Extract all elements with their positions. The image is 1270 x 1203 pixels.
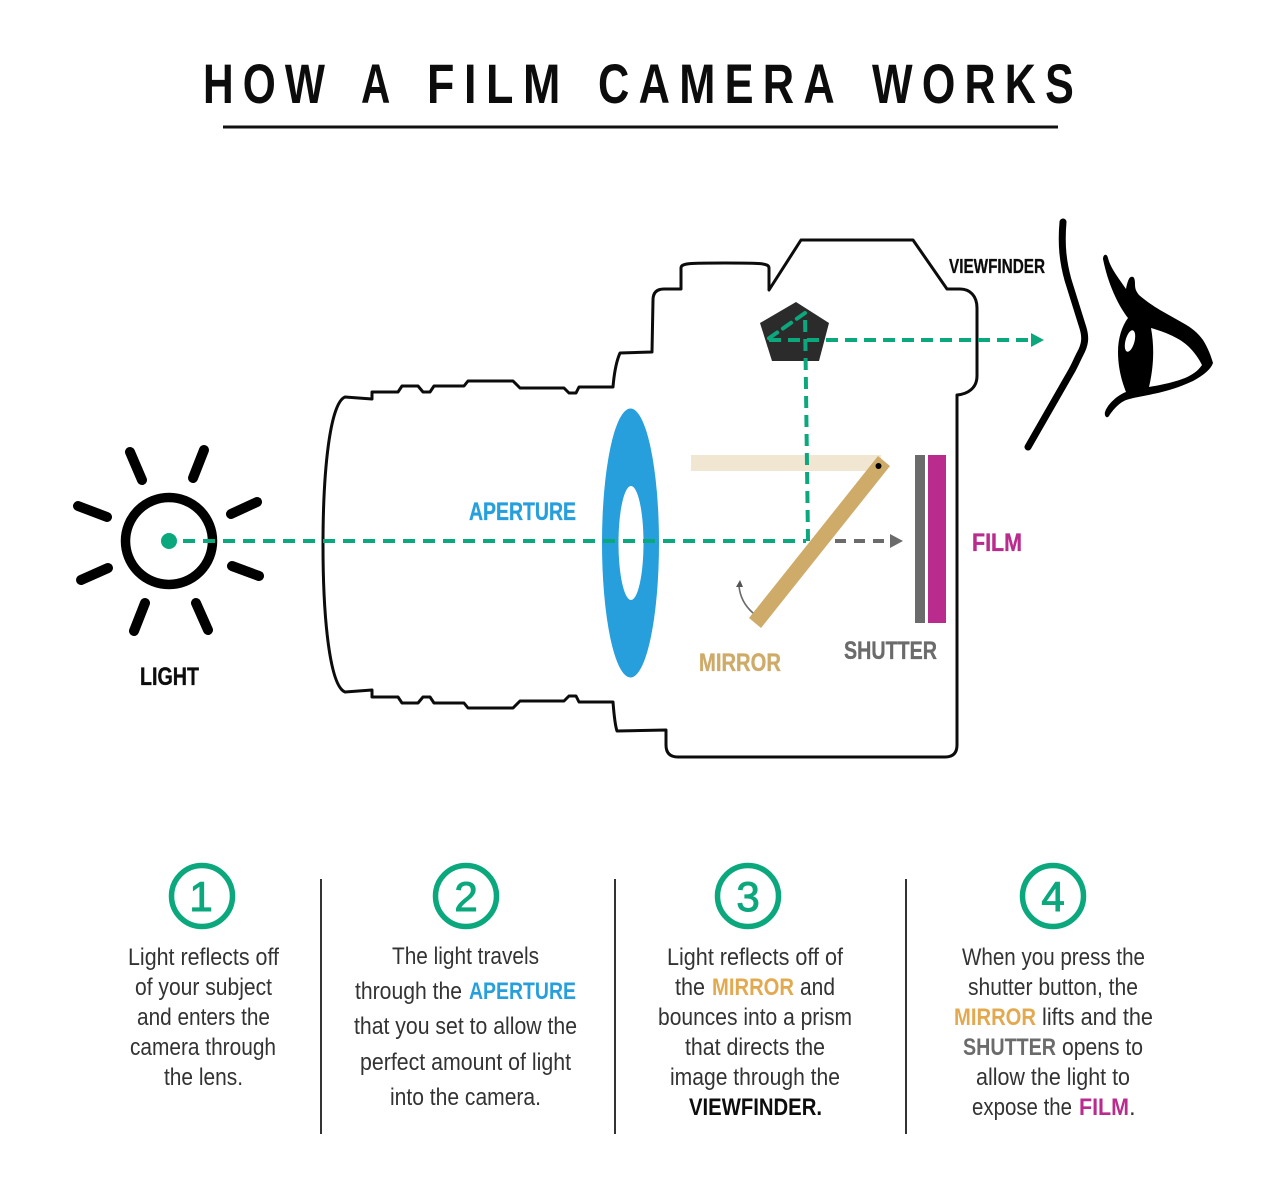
icon: sun (78, 450, 259, 631)
step 1 text: and enters the (137, 1004, 270, 1031)
number badge 1 (172, 866, 232, 926)
step 4 text: SHUTTER (963, 1034, 1056, 1061)
step 4 text: lifts and the (1042, 1004, 1153, 1031)
title: A (361, 52, 399, 115)
step 3 text: image through the (670, 1064, 840, 1091)
step 2 text: that you set to allow the (354, 1013, 577, 1040)
step 3 text: VIEWFINDER. (689, 1094, 822, 1121)
step 2 text: The light travels (392, 943, 539, 970)
label: light: LIGHT (140, 663, 199, 691)
mirror (749, 456, 890, 628)
step 2 (354, 866, 577, 1111)
step 4 text: When you press the (962, 944, 1145, 971)
camera diagram (183, 240, 1044, 757)
step 3 text: and (800, 974, 835, 1001)
pentaprism (760, 302, 829, 361)
step 4 text: opens to (1062, 1034, 1143, 1061)
step 3 text: Light reflects off of (667, 944, 843, 971)
step 4 text (954, 944, 1153, 1121)
light path (183, 313, 1030, 541)
aperture lens (602, 408, 659, 678)
gray path to shutter (835, 534, 903, 548)
step 4 text: MIRROR (954, 1004, 1036, 1031)
step 1 (128, 866, 279, 1091)
icon: eye (1028, 222, 1213, 447)
step 1 text (128, 944, 279, 1091)
step 3 text: bounces into a prism (658, 1004, 852, 1031)
title: HOW (203, 52, 334, 115)
label: aperture: APERTURE (469, 498, 576, 526)
step 2 text: APERTURE (469, 978, 576, 1005)
number badge 1: 1 (189, 873, 213, 920)
step 2 text: into the camera. (390, 1084, 541, 1111)
step 3 text: the (675, 974, 705, 1001)
step 4 text: shutter button, the (968, 974, 1138, 1001)
step 2 text (354, 943, 577, 1111)
title: CAMERA (598, 52, 844, 115)
step 3 text: MIRROR (712, 974, 794, 1001)
number badge 4 (1022, 866, 1084, 926)
camera body outline (323, 240, 977, 757)
step 1 text: camera through (130, 1034, 276, 1061)
step 2 text: perfect amount of light (360, 1049, 571, 1076)
step 3 text (658, 944, 852, 1121)
label: viewfinder: VIEWFINDER (949, 256, 1045, 278)
label: shutter: SHUTTER (844, 637, 937, 665)
number badge 2 (436, 866, 496, 926)
viewfinder arrowhead (1031, 333, 1044, 347)
raised mirror ghost (691, 455, 881, 471)
title: WORKS (872, 52, 1083, 115)
number badge 3: 3 (736, 873, 760, 920)
title: FILM (427, 52, 570, 115)
step 4 text: allow the light to (976, 1064, 1130, 1091)
label: mirror: MIRROR (699, 649, 781, 677)
mirror rotation arrow (736, 580, 753, 613)
number badge 4: 4 (1041, 873, 1065, 920)
step 4 text: expose the (972, 1094, 1072, 1121)
title (203, 52, 1083, 127)
step 3 (658, 866, 852, 1121)
shutter (915, 455, 925, 623)
step 2 text: through the (355, 978, 462, 1005)
step 4 text: FILM (1079, 1094, 1129, 1121)
number badge 2: 2 (454, 873, 478, 920)
step 1 text: Light reflects off (128, 944, 279, 971)
step 4 (954, 866, 1153, 1121)
step 1 text: the lens. (164, 1064, 243, 1091)
film (928, 455, 946, 623)
step 1 text: of your subject (135, 974, 272, 1001)
number badge 3 (718, 866, 778, 926)
step 3 text: that directs the (685, 1034, 825, 1061)
label: film: FILM (972, 529, 1022, 557)
step 4 text: . (1129, 1094, 1136, 1121)
